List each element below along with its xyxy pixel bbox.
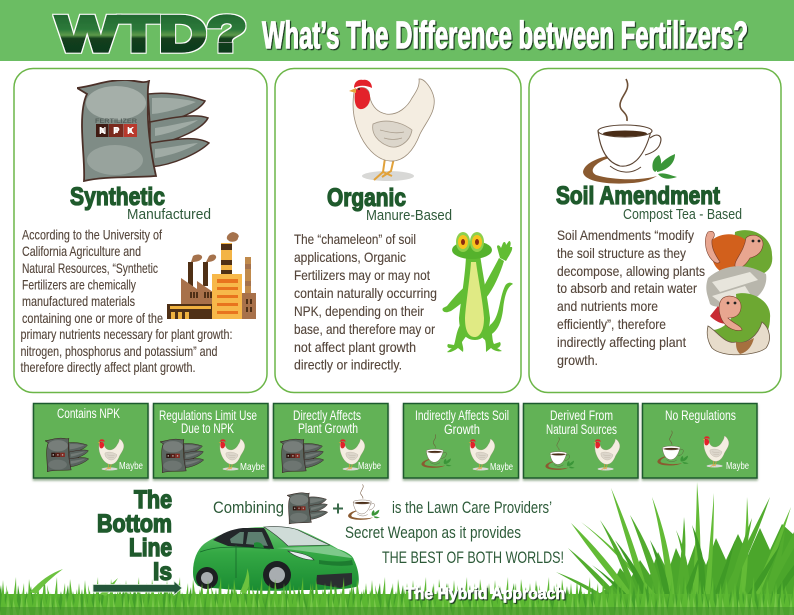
card: directly affects plant growth: Maybe xyxy=(358,461,381,472)
card: contains NPK: Maybe xyxy=(119,461,143,472)
text: synthetic description: nitrogen, phosphorus and potassium” and xyxy=(20,344,218,359)
card: no regulations: Maybe xyxy=(726,461,749,472)
card: derived from natural sources: Derived From xyxy=(550,408,613,423)
icon: bag xyxy=(287,493,328,524)
text: soil amendment description: to absorb and retain water xyxy=(557,281,697,296)
subheading: manufactured: Manufactured xyxy=(127,206,211,223)
text: organic description: The “chameleon” of soil xyxy=(294,232,416,247)
heading: soil amendment: Soil Amendment xyxy=(556,182,721,210)
text: soil amendment description: indirectly affecting plant xyxy=(557,335,686,350)
icon: factory xyxy=(167,232,256,319)
heading: organic: Organic xyxy=(327,184,406,212)
card: contains NPK: Contains NPK xyxy=(57,406,120,421)
text: synthetic description: Natural Resources, “Synthetic xyxy=(22,261,158,276)
text: synthetic description: manufactured materials xyxy=(22,294,135,309)
text: organic description: applications, Organic xyxy=(294,250,406,265)
icon: fertilizer bags xyxy=(77,80,209,181)
text: soil amendment description xyxy=(557,228,705,368)
card: regulations limit use: Regulations Limit Use xyxy=(159,408,257,423)
text: soil amendment description: the soil structure as they xyxy=(557,246,686,261)
logo: WTD?: WTD? xyxy=(56,6,247,62)
text: synthetic description xyxy=(20,228,232,375)
card: no regulations xyxy=(642,404,757,478)
text: combining statement xyxy=(213,484,564,567)
icon: chameleon xyxy=(442,232,513,352)
grass tuft at right xyxy=(556,482,794,600)
grass strip along bottom xyxy=(0,565,794,615)
arrow xyxy=(93,581,182,595)
text: soil amendment description: and nutrients more xyxy=(557,299,658,314)
card: directly affects plant growth: Directly Affects xyxy=(293,408,361,423)
text: organic description: not affect plant growth xyxy=(294,340,416,355)
text: combining statement: THE BEST OF BOTH WORLDS! xyxy=(382,548,564,567)
header banner xyxy=(0,0,794,62)
heading: the bottom line is: Line xyxy=(129,534,172,562)
text: organic description: NPK, depending on their xyxy=(294,304,424,319)
icon: cup xyxy=(348,484,380,520)
card: derived from natural sources xyxy=(524,404,638,478)
card: regulations limit use xyxy=(154,404,268,478)
text: synthetic description: primary nutrients necessary for plant growth: xyxy=(20,327,232,342)
card: indirectly affects soil growth xyxy=(404,404,518,478)
text: synthetic description: containing one or more of the xyxy=(22,311,163,326)
heading: the bottom line is: Is xyxy=(153,558,172,586)
text: synthetic description: California Agriculture and xyxy=(22,244,141,259)
caption: the hybrid approach: The Hybrid Approach xyxy=(405,584,565,603)
panel: synthetic xyxy=(14,68,267,392)
text: combining statement: Secret Weapon as it provides xyxy=(345,523,521,542)
icon: fertilizer bags: FERTILIZER xyxy=(95,118,137,125)
text: organic description: base, and therefore may or xyxy=(294,322,435,337)
heading: the bottom line is: The xyxy=(134,486,172,514)
text: soil amendment description: Soil Amendments “modify xyxy=(557,228,694,243)
card: directly affects plant growth: Plant Growth xyxy=(298,421,358,436)
heading: the bottom line is xyxy=(97,486,172,586)
icon: compost worms xyxy=(705,230,772,355)
icon: fertilizer bags: P xyxy=(113,126,120,137)
card: indirectly affects soil growth: Indirectly Affects Soil xyxy=(415,408,509,423)
text: soil amendment description: efficiently”, therefore xyxy=(557,317,666,332)
text: combining statement: is the Lawn Care Providers’ xyxy=(392,498,552,517)
text: combining statement: Combining xyxy=(213,498,284,517)
icon: hen xyxy=(349,79,434,181)
card: directly affects plant growth xyxy=(274,404,388,478)
icon: fertilizer bags: K xyxy=(127,126,135,137)
panel: organic xyxy=(275,68,521,392)
card: regulations limit use: Due to NPK xyxy=(181,421,234,436)
panel: soil amendment xyxy=(529,68,781,392)
card: indirectly affects soil growth: Maybe xyxy=(490,462,513,473)
text: soil amendment description: growth. xyxy=(557,353,598,368)
card: indirectly affects soil growth: Growth xyxy=(444,422,480,437)
subheading: compost tea: Compost Tea - Based xyxy=(623,206,742,223)
heading: synthetic: Synthetic xyxy=(70,183,165,211)
subheading: manure-based: Manure-Based xyxy=(366,207,452,224)
car xyxy=(193,527,359,591)
icon: coffee cup with leaf xyxy=(583,79,677,184)
card: derived from natural sources: Natural Sources xyxy=(546,422,617,437)
text: synthetic description: therefore directly affect plant growth. xyxy=(20,360,196,375)
card: contains NPK xyxy=(34,404,148,478)
card: no regulations: No Regulations xyxy=(665,408,736,423)
text: organic description: Fertilizers may or may not xyxy=(294,268,430,283)
text: synthetic description: Fertilizers are chemically xyxy=(22,278,136,292)
heading: the bottom line is: Bottom xyxy=(97,510,172,538)
text: organic description xyxy=(294,232,437,372)
text: soil amendment description: decompose, allowing plants xyxy=(557,264,705,279)
text: synthetic description: According to the University of xyxy=(22,228,162,242)
icon: fertilizer bags: N xyxy=(99,126,106,137)
plus sign xyxy=(333,504,343,514)
text: organic description: contain naturally occurring xyxy=(294,286,437,301)
card: regulations limit use: Maybe xyxy=(240,462,265,473)
text: organic description: directly or indirectly. xyxy=(294,358,402,372)
